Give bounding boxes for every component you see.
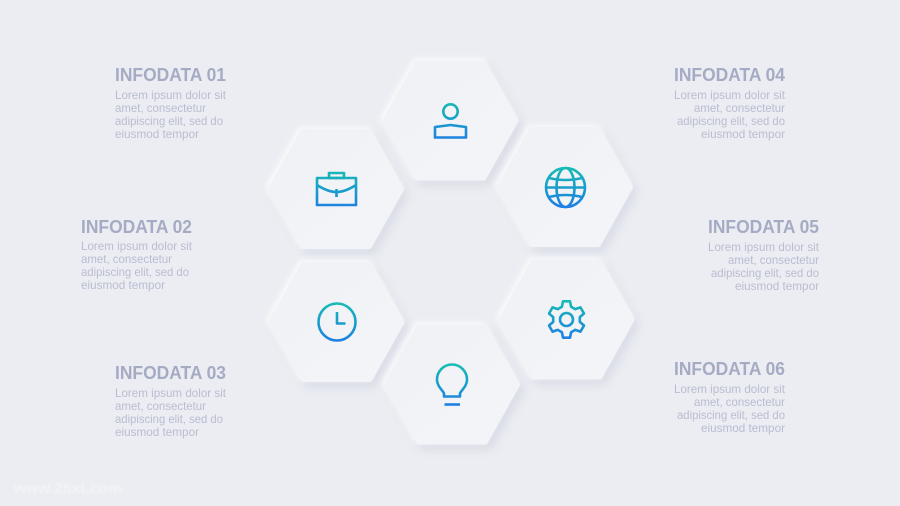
hexagon card 2: briefcase	[271, 132, 401, 246]
text block: infodata 05	[708, 217, 820, 293]
text block: infodata 05: adipiscing elit, sed do	[711, 266, 819, 280]
text block: infodata 05: Lorem ipsum dolor sit	[708, 240, 820, 254]
text block: infodata 03	[115, 363, 227, 439]
text block: infodata 03: INFODATA 03	[115, 363, 226, 383]
text block: infodata 06	[674, 359, 786, 435]
text block: infodata 06: amet, consectetur	[694, 395, 785, 409]
icon: briefcase	[317, 173, 356, 205]
text block: infodata 04: adipiscing elit, sed do	[677, 114, 785, 128]
text block: infodata 06: INFODATA 06	[674, 359, 785, 379]
text block: infodata 06: eiusmod tempor	[701, 421, 785, 435]
text block: infodata 02: Lorem ipsum dolor sit	[81, 239, 193, 253]
text block: infodata 02: eiusmod tempor	[81, 278, 165, 292]
text block: infodata 02: amet, consectetur	[81, 252, 172, 266]
text block: infodata 02: INFODATA 02	[81, 217, 192, 237]
text block: infodata 03: amet, consectetur	[115, 399, 206, 413]
text block: infodata 04: eiusmod tempor	[701, 127, 785, 141]
text block: infodata 04: Lorem ipsum dolor sit	[674, 88, 786, 102]
text block: infodata 01: INFODATA 01	[115, 65, 226, 85]
text block: infodata 06: Lorem ipsum dolor sit	[674, 382, 786, 396]
text block: infodata 05: eiusmod tempor	[735, 279, 819, 293]
icon: lightbulb	[437, 364, 467, 404]
icon: clock	[318, 304, 356, 340]
icon: gear	[549, 301, 584, 338]
text block: infodata 01: adipiscing elit, sed do	[115, 114, 223, 128]
text block: infodata 01: eiusmod tempor	[115, 127, 199, 141]
text block: infodata 01: Lorem ipsum dolor sit	[115, 88, 227, 102]
watermark: www.25xt.com	[13, 480, 122, 497]
text block: infodata 06: adipiscing elit, sed do	[677, 408, 785, 422]
text block: infodata 01: amet, consectetur	[115, 101, 206, 115]
hexagon card 6: lightbulb	[387, 328, 517, 442]
text block: infodata 01	[115, 65, 227, 141]
text block: infodata 05: INFODATA 05	[708, 217, 819, 237]
text block: infodata 04: amet, consectetur	[694, 101, 785, 115]
hexagon card 3: clock	[272, 265, 402, 379]
hexagon card 1: user	[386, 64, 516, 178]
text block: infodata 05: amet, consectetur	[728, 253, 819, 267]
text block: infodata 03: Lorem ipsum dolor sit	[115, 386, 227, 400]
text block: infodata 04: INFODATA 04	[674, 65, 785, 85]
text block: infodata 02: adipiscing elit, sed do	[81, 265, 189, 279]
icon: globe	[546, 168, 585, 207]
text block: infodata 04	[674, 65, 786, 141]
text block: infodata 03: adipiscing elit, sed do	[115, 412, 223, 426]
hexagon card 4: globe	[500, 130, 630, 244]
hexagon card 5: gear	[502, 262, 632, 376]
text block: infodata 03: eiusmod tempor	[115, 425, 199, 439]
text block: infodata 02	[81, 217, 193, 292]
icon: user	[435, 104, 466, 138]
